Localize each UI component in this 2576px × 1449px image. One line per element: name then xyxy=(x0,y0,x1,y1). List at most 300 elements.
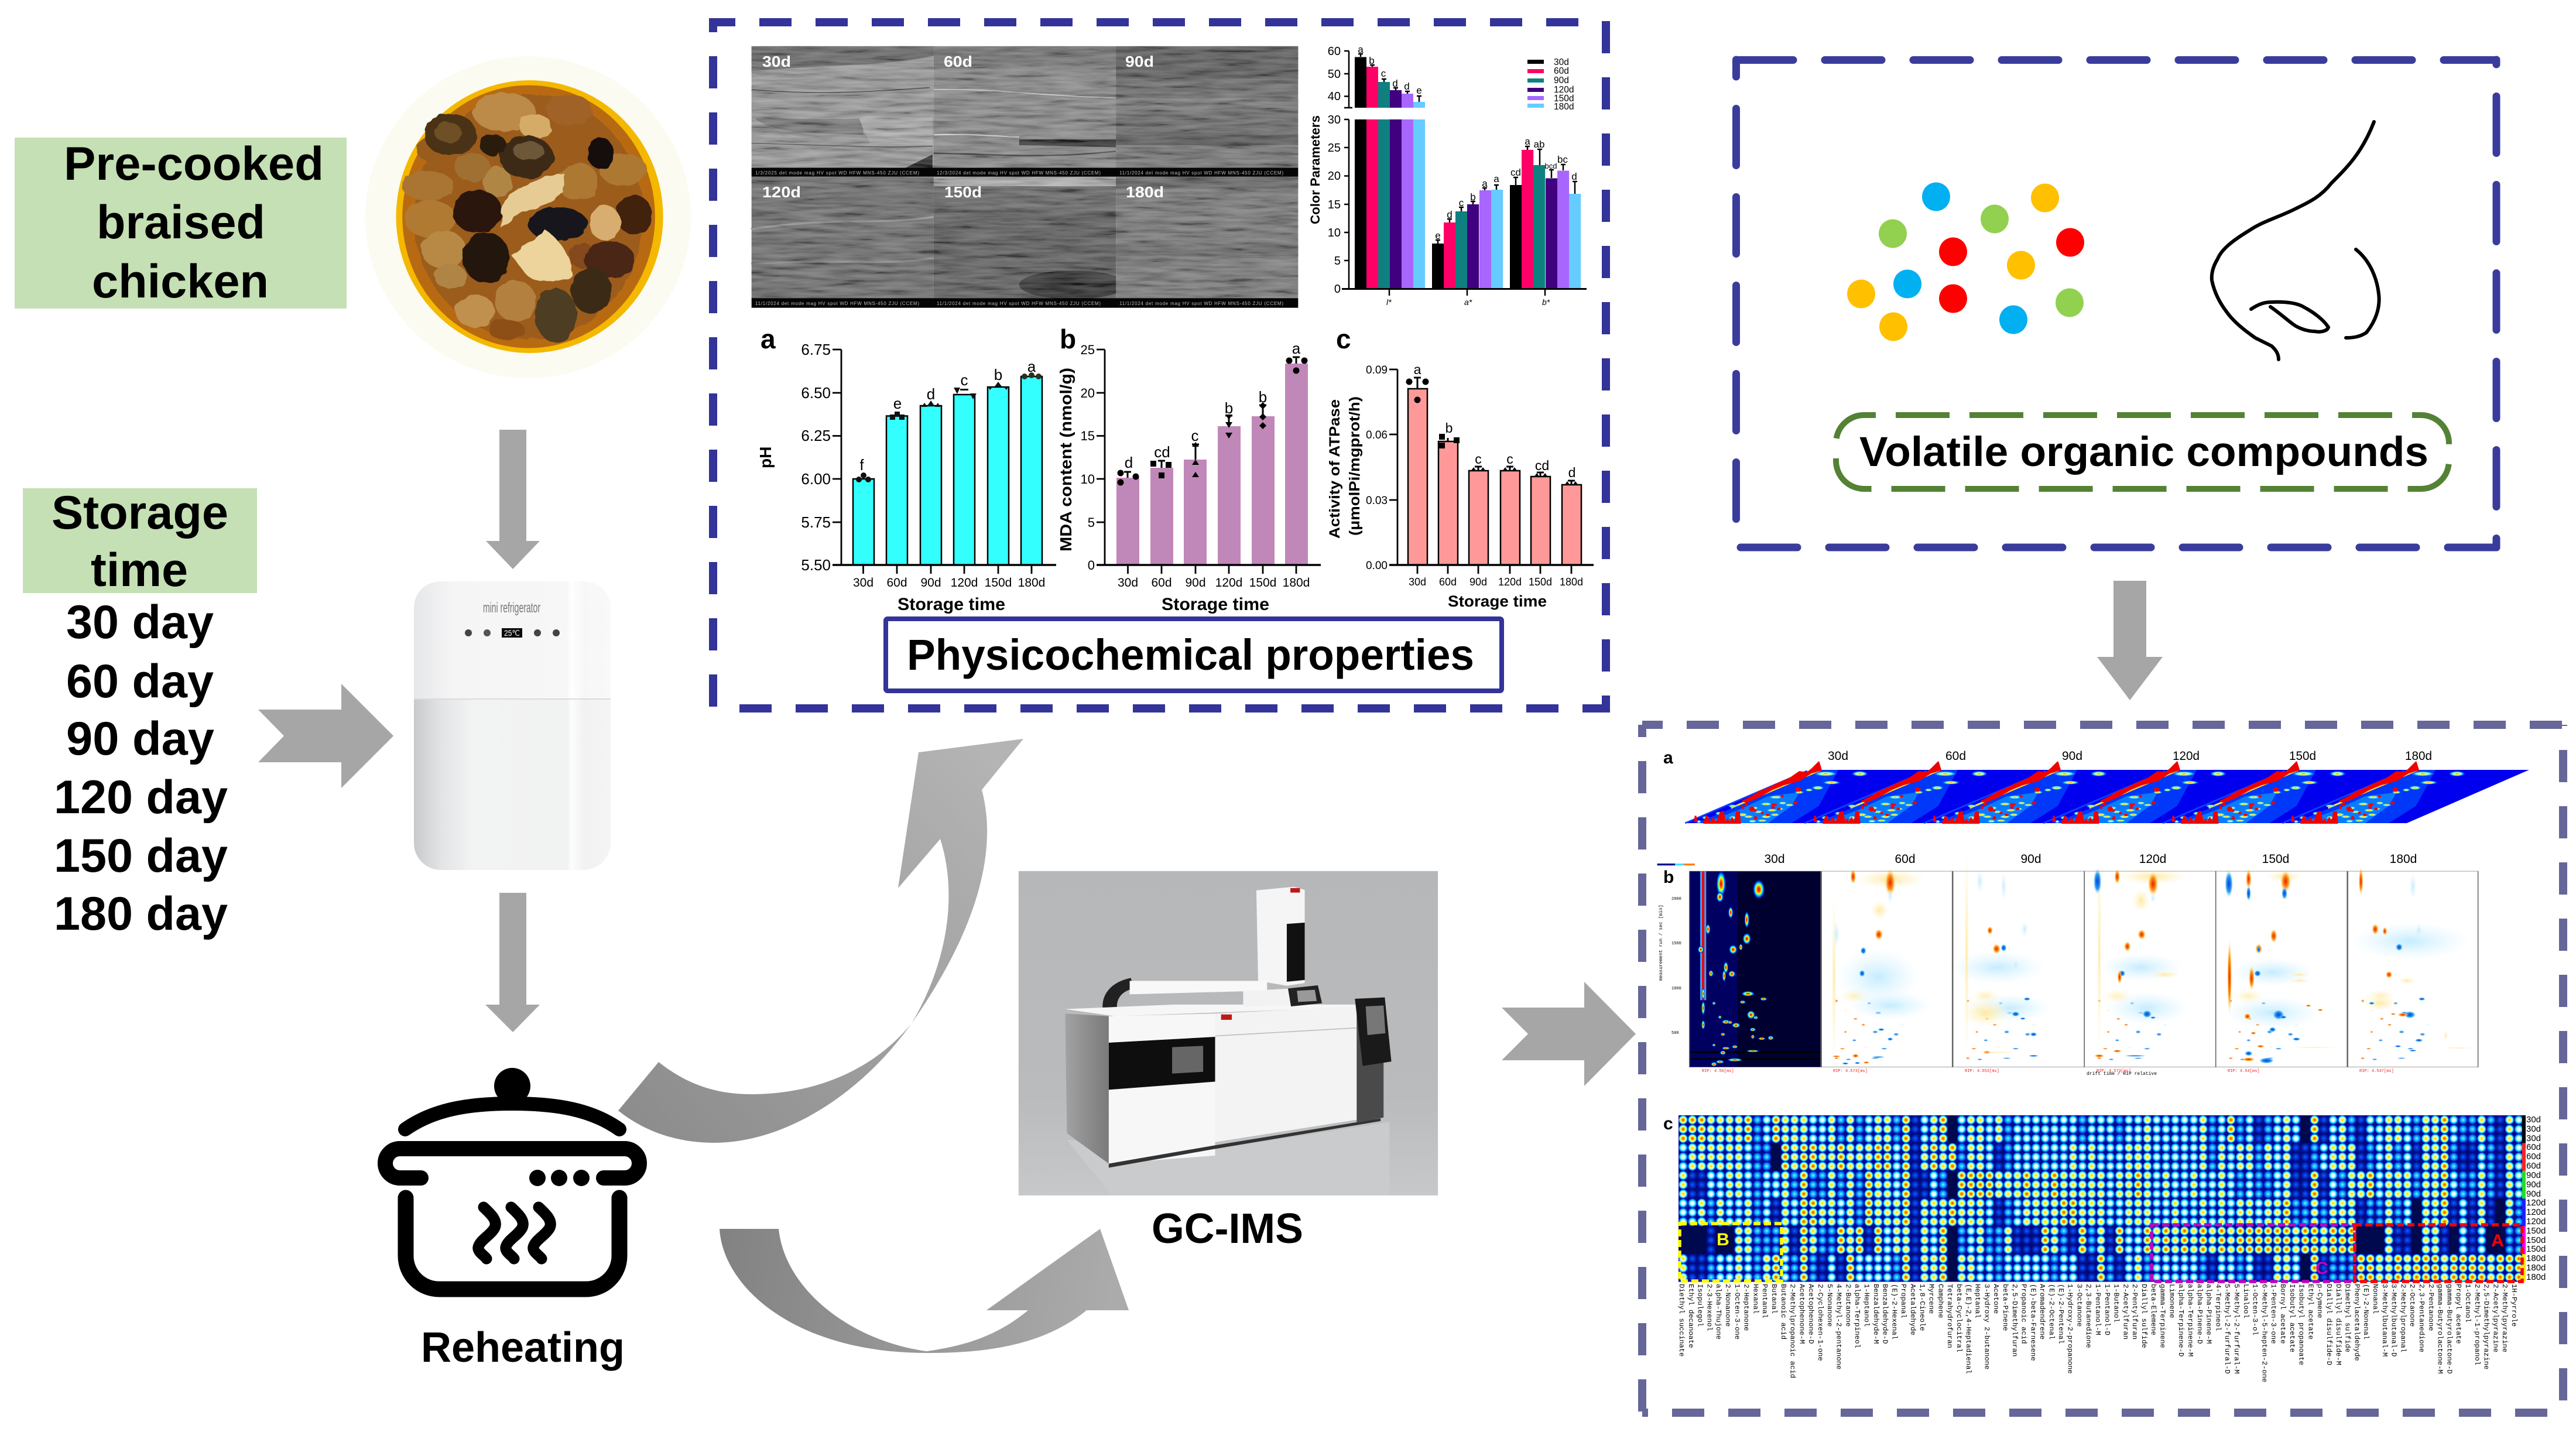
compound labels: Butanal xyxy=(1770,1284,1778,1314)
row labels: 60d xyxy=(2526,1152,2541,1162)
compound labels: 2-Methylpyrazine xyxy=(2500,1284,2509,1352)
compound labels: 2-Butanone xyxy=(1844,1284,1852,1327)
arrow: reheating to GC-IMS xyxy=(720,1229,1129,1353)
chart b: MDA content: c xyxy=(1191,427,1199,444)
compound labels: beta-Cyclocitral xyxy=(1955,1284,1963,1352)
chart b: 2D difference spectra: RIP: 4.553[ms] xyxy=(1965,1069,1999,1074)
chart b: MDA content: cd xyxy=(1154,443,1170,461)
chart c: ATPase activity xyxy=(1327,324,1594,610)
chart: color parameters: c xyxy=(1381,68,1386,79)
chart b: 2D difference spectra: RIP: 4.573[ms] xyxy=(2097,1069,2131,1074)
compound labels: 2-Octanone xyxy=(2408,1284,2416,1327)
compound labels: (E)-2-Pentenal xyxy=(2057,1284,2065,1344)
region boxes A B C xyxy=(1680,1224,2522,1282)
arrow: days to refrigerator xyxy=(258,684,393,788)
panel: volatile organic compounds xyxy=(1736,60,2496,547)
chart b: 2D difference spectra: 60d xyxy=(1895,852,1916,866)
row labels: 180d xyxy=(2526,1263,2546,1273)
chart b: MDA content: b xyxy=(1060,324,1076,354)
legend: storage days: 180d xyxy=(1554,102,1574,112)
chart a: 3D topographic spectra: 90d xyxy=(2062,749,2082,763)
compound labels: 2-3-Hexenol xyxy=(1705,1284,1713,1331)
chart b: 2D difference spectra: 1000 xyxy=(1671,986,1681,991)
compound labels: 4-Methyl-2-pentanone xyxy=(1835,1284,1843,1369)
image: SEM micrographs: 1/3/2025 det mode mag HV spot WD HFW MNS-450 ZJU (CCEM) xyxy=(755,170,919,176)
label: GC-IMS: GC-IMS xyxy=(1152,1205,1303,1252)
compound labels: Benzaldehyde-D xyxy=(1881,1284,1889,1344)
chart: color parameters: 60 xyxy=(1328,45,1341,58)
chart a: pH: 120d xyxy=(951,576,978,590)
compound labels: Heptanal xyxy=(1974,1284,1982,1318)
compound labels: 2,5-Dimethylpyrazine xyxy=(2482,1284,2491,1369)
image: mini refrigerator: 25℃ xyxy=(504,628,520,638)
compound labels: 2-Methylpropanal xyxy=(2399,1284,2407,1352)
chart b: 2D difference spectra: 90d xyxy=(2020,852,2041,866)
compound labels: 2-Cyclohexen-1-one xyxy=(1816,1284,1824,1361)
chart b: MDA content: b xyxy=(1259,388,1267,406)
chart: color parameters: d xyxy=(1447,209,1453,220)
chart b: 2D difference spectra: 150d xyxy=(2262,852,2289,866)
chart: color parameters: bc xyxy=(1557,154,1568,165)
chart: color parameters: a xyxy=(1482,178,1488,189)
compound labels: Pentanal xyxy=(1760,1284,1769,1318)
image: SEM micrographs: 150d xyxy=(944,183,982,201)
chart a: pH: e xyxy=(893,395,902,412)
chart a: pH: b xyxy=(994,366,1002,383)
chart a: pH: 5.50 xyxy=(801,556,831,574)
compound labels: 2,5-Dimethylfuran xyxy=(2010,1284,2019,1356)
compound labels: 1-Pentanol-M xyxy=(2094,1284,2102,1335)
chart c: ATPase activity: a xyxy=(1414,362,1421,377)
chart b: MDA content: 90d xyxy=(1185,576,1206,590)
arrow: refrigerator to reheating xyxy=(485,893,540,1032)
compound labels: 4-Terpineol xyxy=(2214,1284,2222,1331)
chart b: 2D difference spectra: RIP: 4.547[ms] xyxy=(2359,1069,2394,1074)
heading: Physicochemical properties xyxy=(886,619,1502,691)
list: storage days: 60 day xyxy=(66,655,214,708)
list: storage days: 90 day xyxy=(66,712,214,765)
chart c: ATPase activity: 0.06 xyxy=(1366,429,1388,441)
chart: color parameters: b* xyxy=(1542,297,1550,307)
compound labels: 3-Hydroxy 2-butanone xyxy=(1982,1284,1991,1369)
list: storage days: 180 day xyxy=(54,888,228,940)
chart: color parameters: a xyxy=(1493,173,1499,184)
compound labels: Diallyl sulfide xyxy=(2140,1284,2148,1348)
chart c: ATPase activity: c xyxy=(1336,324,1351,354)
chart a: 3D topographic spectra xyxy=(1663,748,2529,823)
chart b: 2D difference spectra: b xyxy=(1663,868,1674,887)
chart a: pH: a xyxy=(761,324,776,354)
chart a: 3D topographic spectra: 180d xyxy=(2405,749,2432,763)
chart c: ATPase activity: 60d xyxy=(1439,576,1457,588)
compound labels: (E)-2-Hexenal xyxy=(1890,1284,1898,1340)
chart a: 3D topographic spectra: 150d xyxy=(2289,749,2316,763)
label: Storage time: Storage xyxy=(52,487,228,539)
label: Volatile organic compounds xyxy=(1836,415,2449,489)
chart a: 3D topographic spectra: 120d xyxy=(2173,749,2200,763)
chart: color parameters: a xyxy=(1358,44,1364,55)
chart b: MDA content: 0 xyxy=(1088,558,1095,573)
row labels: 120d xyxy=(2526,1207,2546,1217)
image: SEM micrographs xyxy=(752,46,1298,308)
arrow: GC-IMS to data xyxy=(1502,982,1636,1086)
chart: color parameters: b xyxy=(1470,191,1476,203)
chart c: fingerprint heatmap xyxy=(1663,1114,2546,1382)
chart a: pH: f xyxy=(859,456,864,474)
chart b: MDA content: 25 xyxy=(1081,342,1095,357)
compound labels: 2-Methyl-1-propanol xyxy=(2473,1284,2481,1365)
compound labels: gamma-Butyrolactone-D xyxy=(2445,1284,2453,1374)
legend: storage days: 60d xyxy=(1554,66,1569,76)
chart b: MDA content: 180d xyxy=(1283,576,1310,590)
chart b: MDA content: d xyxy=(1125,454,1133,471)
label: Pre-cooked braised chicken: braised xyxy=(97,196,265,249)
chart c: ATPase activity: 0.09 xyxy=(1366,364,1388,376)
chart b: 2D difference spectra xyxy=(1657,841,2478,1077)
chart: color parameters: d xyxy=(1571,171,1577,182)
compound labels: (E,E)-2,4-Heptadienal xyxy=(1964,1284,1972,1374)
chart b: 2D difference spectra: 2000 xyxy=(1671,897,1681,902)
compound labels xyxy=(1677,1284,2518,1382)
compound labels: Dimethyl sulfide xyxy=(2344,1284,2352,1352)
chart c: ATPase activity: b xyxy=(1445,420,1453,436)
icon: odor molecules xyxy=(1847,183,2084,341)
chart b: 2D difference spectra: 180d xyxy=(2390,852,2417,866)
image: SEM micrographs: 11/1/2024 det mode mag HV spot WD HFW MNS-450 ZJU (CCEM) xyxy=(1119,301,1283,306)
compound labels: Butanoic acid xyxy=(1779,1284,1787,1340)
chart b: 2D difference spectra: drift time / RIP relative xyxy=(2087,1071,2157,1077)
chart b: MDA content: b xyxy=(1225,399,1233,417)
chart: color parameters: l* xyxy=(1386,297,1392,307)
legend: storage days: 90d xyxy=(1554,76,1569,85)
chart: color parameters: 0 xyxy=(1334,283,1341,296)
compound labels: Isobutyl acetate xyxy=(2288,1284,2296,1352)
chart c: ATPase activity: 150d xyxy=(1529,576,1552,588)
compound labels: Limonene xyxy=(2167,1284,2176,1318)
image: SEM micrographs: 30d xyxy=(762,53,791,70)
compound labels: Phenylacetaldehyde xyxy=(2352,1284,2361,1361)
compound labels: beta-Pinene xyxy=(2001,1284,2009,1331)
row labels: 90d xyxy=(2526,1189,2541,1199)
chart b: 2D difference spectra: 120d xyxy=(2139,852,2166,866)
chart b: MDA content: Storage time xyxy=(1162,595,1269,614)
chart b: 2D difference spectra: 500 xyxy=(1671,1031,1679,1036)
compound labels: alpha-Terpinene-M xyxy=(2186,1284,2194,1356)
compound labels: alpha-Thujone xyxy=(1714,1284,1722,1340)
compound labels: 3-Methylbutanal-D xyxy=(2390,1284,2398,1356)
chart: color parameters: cd xyxy=(1510,167,1521,178)
compound labels: 1-Octanol xyxy=(2464,1284,2472,1323)
chart a: pH: 5.75 xyxy=(801,513,831,531)
image: SEM micrographs: 90d xyxy=(1125,53,1154,70)
row labels: 150d xyxy=(2526,1244,2546,1254)
compound labels: Propanoic acid xyxy=(2020,1284,2028,1344)
region letters xyxy=(1717,1230,2504,1278)
chart a: pH: 30d xyxy=(853,576,873,590)
region letters: C xyxy=(2315,1259,2328,1278)
legend: storage days: 150d xyxy=(1554,94,1574,104)
arrow: volatile compounds to data panel xyxy=(2097,581,2163,700)
chart c: ATPase activity: Storage time xyxy=(1448,592,1547,610)
chart: color parameters: d xyxy=(1404,81,1410,92)
compound labels: Benzaldehyde-M xyxy=(1872,1284,1880,1344)
compound labels: gamma-Terpinene xyxy=(2159,1284,2167,1348)
chart b: MDA content: a xyxy=(1292,340,1301,357)
compound labels: (E)-2-Octenal xyxy=(2047,1284,2056,1340)
image: SEM micrographs: 60d xyxy=(944,53,972,70)
row labels: 90d xyxy=(2526,1170,2541,1180)
chart c: ATPase activity: d xyxy=(1568,465,1575,480)
chart a: pH: 6.25 xyxy=(801,427,831,444)
row labels: 60d xyxy=(2526,1142,2541,1152)
compound labels: Myrcene xyxy=(1927,1284,1936,1314)
chart b: 2D difference spectra: 1500 xyxy=(1671,941,1681,946)
compound labels: Diallyl disulfide-M xyxy=(2334,1284,2342,1365)
chart a: 3D topographic spectra: a xyxy=(1663,748,1673,768)
compound labels: p-Cymene xyxy=(2315,1284,2324,1318)
legend: storage days: 30d xyxy=(1554,57,1569,67)
compound labels: alpha-Terpinene-D xyxy=(2177,1284,2185,1356)
chart a: pH: 60d xyxy=(886,576,907,590)
label: Volatile organic compounds: Volatile organic compounds xyxy=(1859,429,2428,475)
compound labels: Acetaldehyde xyxy=(1909,1284,1917,1335)
compound labels: 2-Methylpropanoic acid xyxy=(1789,1284,1797,1378)
chart c: ATPase activity: 90d xyxy=(1469,576,1487,588)
image: SEM micrographs: 180d xyxy=(1126,183,1164,201)
compound labels: 1-Hydroxy-2-propanone xyxy=(2066,1284,2074,1374)
chart c: ATPase activity: c xyxy=(1475,451,1482,467)
compound labels: 5-Methyl-2-furfural-M xyxy=(2232,1284,2241,1374)
chart: color parameters: e xyxy=(1416,85,1422,96)
compound labels: 5-Methyl-2-furfural-D xyxy=(2223,1284,2231,1374)
chart: color parameters: 15 xyxy=(1328,198,1341,211)
region letters: B xyxy=(1717,1230,1729,1249)
chart: color parameters: 5 xyxy=(1334,255,1341,268)
compound labels: Tetrahydrofuran xyxy=(1945,1284,1954,1348)
image: SEM micrographs: 11/1/2024 det mode mag HV spot WD HFW MNS-450 ZJU (CCEM) xyxy=(1119,170,1283,176)
chart: color parameters: b xyxy=(1369,55,1375,66)
compound labels: 1-Butanol xyxy=(2112,1284,2121,1323)
compound labels: Ethyl acetate xyxy=(2306,1284,2314,1340)
compound labels: Linalool xyxy=(2242,1284,2250,1318)
chart a: pH: Storage time xyxy=(898,595,1005,614)
chart b: 2D difference spectra: RIP: 4.54[ms] xyxy=(2228,1069,2260,1074)
arrow: reheating to physicochemical properties xyxy=(618,739,1023,1143)
group colour strip xyxy=(2522,1115,2526,1282)
chart: color parameters: 50 xyxy=(1328,68,1341,81)
row labels: 120d xyxy=(2526,1217,2546,1227)
compound labels: Propanal xyxy=(1899,1284,1907,1318)
compound labels: Acetone xyxy=(1992,1284,2000,1314)
chart a: 3D topographic spectra: 60d xyxy=(1945,749,1966,763)
chart: color parameters: d xyxy=(1392,78,1398,89)
legend: storage days: 120d xyxy=(1554,85,1574,95)
list: storage days: 30 day xyxy=(66,596,214,649)
compound labels: 6-Methyl-5-hepten-2-one xyxy=(2260,1284,2268,1382)
panel: physicochemical properties xyxy=(709,18,1610,712)
image: SEM micrographs: 11/1/2024 det mode mag HV spot WD HFW MNS-450 ZJU (CCEM) xyxy=(937,301,1101,306)
chart a: pH: 6.50 xyxy=(801,384,831,402)
label: Storage time: time xyxy=(91,544,188,597)
image: plate of braised chicken xyxy=(365,56,691,378)
chart: color parameters: Color Parameters xyxy=(1308,115,1323,224)
chart a: pH xyxy=(756,324,1056,614)
chart b: MDA content: 120d xyxy=(1215,576,1242,590)
compound labels: 2-Acetylpyrazine xyxy=(2491,1284,2499,1352)
panel: GC-IMS results xyxy=(1642,725,2567,1417)
heading: Physicochemical properties: Physicochemical properties xyxy=(907,631,1474,679)
compound labels: 2,3-Butanedione xyxy=(2084,1284,2092,1348)
compound labels: Diethyl succinate xyxy=(1677,1284,1686,1356)
image: SEM micrographs: 12/3/2024 det mode mag HV spot WD HFW MNS-450 ZJU (CCEM) xyxy=(937,170,1101,176)
chart: color parameters: 30 xyxy=(1328,114,1341,126)
chart a: pH: 6.75 xyxy=(801,341,831,358)
compound labels: Isopulegol xyxy=(1696,1284,1704,1327)
image: GC-IMS instrument xyxy=(1019,871,1438,1195)
heatmap cells xyxy=(1678,1115,2523,1282)
compound labels: Acetophenone-M xyxy=(1797,1284,1806,1344)
chart c: ATPase activity: 120d xyxy=(1498,576,1522,588)
chart b: MDA content: 150d xyxy=(1249,576,1276,590)
chart: color parameters: 25 xyxy=(1328,142,1341,155)
compound labels: alpha-Pinene-M xyxy=(2205,1284,2213,1344)
list: storage days xyxy=(54,596,228,940)
compound labels: 1H-Pyrrole xyxy=(2510,1284,2518,1327)
compound labels: 2-Pentylfuran xyxy=(2130,1284,2139,1340)
list: storage days: 150 day xyxy=(54,830,228,882)
chart: color parameters: a xyxy=(1525,136,1530,147)
compound labels: 1-Heptanol xyxy=(1862,1284,1871,1327)
chart: color parameters: 20 xyxy=(1328,170,1341,183)
chart b: MDA content: 5 xyxy=(1088,515,1095,530)
chart b: 2D difference spectra: 30d xyxy=(1764,852,1785,866)
compound labels: Bornyl acetate xyxy=(2279,1284,2287,1344)
chart c: ATPase activity: c xyxy=(1506,451,1513,467)
image: mini refrigerator xyxy=(414,581,611,870)
chart c: ATPase activity: 30d xyxy=(1409,576,1426,588)
chart: color parameters: e xyxy=(1435,230,1441,241)
compound labels: 3-Methylbutanal-M xyxy=(2380,1284,2389,1356)
chart: color parameters xyxy=(1308,44,1587,307)
chart b: MDA content: MDA content (nmol/g) xyxy=(1057,368,1075,551)
image: SEM micrographs: 120d xyxy=(762,183,801,201)
compound labels: Diallyl disulfide-D xyxy=(2325,1284,2333,1365)
row labels xyxy=(2526,1115,2546,1282)
compound labels: 1-Pentanol-D xyxy=(2103,1284,2111,1335)
compound labels: Aromadendrene xyxy=(2038,1284,2046,1340)
chart c: ATPase activity: 180d xyxy=(1560,576,1583,588)
compound labels: alpha-Pinene-D xyxy=(2195,1284,2204,1344)
row labels: 120d xyxy=(2526,1198,2546,1208)
chart b: MDA content: 20 xyxy=(1081,386,1095,400)
compound labels: 1-Octen-3-one xyxy=(1733,1284,1741,1340)
compound labels: 1,8-Cineole xyxy=(1918,1284,1926,1331)
icon: cooking pot xyxy=(385,1068,639,1289)
chart c: ATPase activity: Activity of ATPase xyxy=(1327,399,1343,539)
label: Storage time xyxy=(23,487,257,597)
label: Pre-cooked braised chicken: Pre-cooked xyxy=(64,138,324,190)
chart c: ATPase activity: 0.03 xyxy=(1366,495,1388,507)
compound labels: 2-Heptanone xyxy=(1742,1284,1751,1331)
chart b: MDA content: 60d xyxy=(1151,576,1172,590)
chart: color parameters: c xyxy=(1459,197,1464,208)
arrow: chicken to refrigerator xyxy=(486,430,540,569)
compound labels: Propyl acetate xyxy=(2454,1284,2462,1344)
chart b: MDA content: 15 xyxy=(1081,429,1095,443)
chart c: ATPase activity: 0.00 xyxy=(1366,560,1388,572)
row labels: 30d xyxy=(2526,1133,2541,1143)
row labels: 180d xyxy=(2526,1253,2546,1263)
row labels: 150d xyxy=(2526,1235,2546,1245)
icon: nose xyxy=(2212,122,2379,359)
compound labels: Acetophenone-D xyxy=(1807,1284,1815,1344)
compound labels: Hexanal xyxy=(1751,1284,1759,1314)
compound labels: 5-Nonanone xyxy=(1825,1284,1834,1327)
chart a: 3D topographic spectra: 30d xyxy=(1828,749,1848,763)
image: mini refrigerator: mini refrigerator xyxy=(483,600,540,616)
chart b: 2D difference spectra: RIP: 4.573[ms] xyxy=(1833,1069,1868,1074)
row labels: 30d xyxy=(2526,1115,2541,1125)
compound labels: 2-Nonanone xyxy=(1724,1284,1732,1327)
chart a: pH: a xyxy=(1027,358,1036,375)
chart a: pH: 180d xyxy=(1018,576,1045,590)
compound labels: 3-Octanone xyxy=(2075,1284,2083,1327)
chart c: fingerprint heatmap: c xyxy=(1663,1114,1673,1133)
chart: color parameters: ab xyxy=(1534,139,1544,150)
chart b: MDA content xyxy=(1057,324,1321,614)
compound labels: 1-Penten-3-one xyxy=(2269,1284,2277,1344)
compound labels: 2,3-Pentanedione xyxy=(2417,1284,2426,1352)
label: Reheating: Reheating xyxy=(421,1324,625,1371)
label: Pre-cooked braised chicken: chicken xyxy=(92,255,269,308)
chart b: MDA content: 10 xyxy=(1081,472,1095,487)
chart: color parameters: a* xyxy=(1464,297,1472,307)
chart a: pH: 6.00 xyxy=(801,470,831,488)
compound labels: (E)-beta-Farnesene xyxy=(2029,1284,2037,1361)
row labels: 180d xyxy=(2526,1272,2546,1282)
chart a: pH: 150d xyxy=(985,576,1012,590)
chart b: MDA content: 30d xyxy=(1118,576,1138,590)
chart a: pH: pH xyxy=(756,447,775,468)
compound labels: Ethyl decanoate xyxy=(1687,1284,1695,1348)
chart c: ATPase activity: cd xyxy=(1535,458,1549,473)
chart b: 2D difference spectra: RIP: 4.56[ms] xyxy=(1702,1069,1734,1074)
image: SEM micrographs: 11/1/2024 det mode mag HV spot WD HFW MNS-450 ZJU (CCEM) xyxy=(755,301,919,306)
compound labels: Nonanal xyxy=(2371,1284,2379,1314)
compound labels: Isobutyl propanoate xyxy=(2297,1284,2306,1365)
chart: color parameters: bcd xyxy=(1545,162,1557,170)
chart a: pH: d xyxy=(927,385,935,403)
chart: color parameters: 40 xyxy=(1328,90,1341,103)
compound labels: beta-Elemene xyxy=(2149,1284,2157,1335)
compound labels: 2-Acetylfuran xyxy=(2121,1284,2129,1340)
compound labels: 1-Octen-3-ol xyxy=(2251,1284,2259,1335)
row labels: 30d xyxy=(2526,1124,2541,1134)
compound labels: 2-Pentanone xyxy=(2427,1284,2435,1331)
row labels: 60d xyxy=(2526,1161,2541,1171)
row labels: 90d xyxy=(2526,1180,2541,1190)
row labels: 150d xyxy=(2526,1226,2546,1236)
chart c: ATPase activity: (μmolPi/mgprot/h) xyxy=(1347,396,1363,536)
compound labels: Camphene xyxy=(1936,1284,1944,1318)
compound labels: alpha-Terpineol xyxy=(1853,1284,1861,1348)
region letters: A xyxy=(2491,1231,2504,1251)
legend: storage days xyxy=(1527,57,1574,112)
chart a: pH: 90d xyxy=(920,576,941,590)
compound labels: (E)-2-Nonenal xyxy=(2362,1284,2370,1340)
compound labels: gamma-Butyrolactone-M xyxy=(2436,1284,2444,1374)
chart b: 2D difference spectra: measurement run / sec [min] xyxy=(1659,905,1664,981)
